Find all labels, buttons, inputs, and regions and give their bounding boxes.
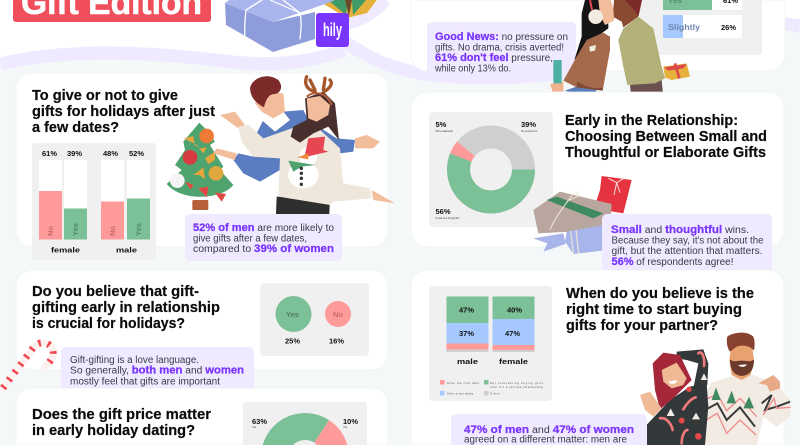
legend: Not considering buying gifts	[490, 381, 544, 385]
panel: small or elaborate	[411, 92, 784, 247]
chart: yes and no circles	[260, 283, 369, 356]
legend: Other	[490, 392, 500, 396]
callout: small and thoughtful: Small and thoughtful wins.	[611, 224, 749, 236]
callout: 47% agreed	[451, 414, 647, 445]
bar chart: female and male: No	[108, 226, 117, 236]
callout: good news: gifts. No drama, crisis averted!	[435, 42, 564, 54]
donut chart: gift type: 5%	[436, 120, 447, 129]
bar chart: female and male: 61%	[42, 149, 57, 158]
bar chart: female and male: Yes	[71, 223, 80, 236]
heading	[32, 87, 215, 136]
chart: yes and no circles: 16%	[329, 336, 344, 346]
chart: yes and no circles: Yes	[286, 310, 299, 319]
woman	[640, 349, 708, 445]
callout: good news: while only 13% do.	[434, 64, 511, 74]
heading: To give or not to give	[32, 87, 178, 104]
stacked bar chart: 47%	[505, 329, 520, 338]
donut chart: gift type: More elaborate	[436, 129, 454, 133]
bar chart: female and male: No	[46, 226, 55, 236]
heading: a few dates?	[32, 119, 119, 136]
callout: small and thoughtful: 56% of respondents agree!	[612, 256, 734, 268]
legend: until it's a serious relationship	[490, 385, 544, 389]
icon: candy cane	[3, 343, 53, 388]
callout: 52% of men: 52% of men are more likely to	[193, 222, 334, 234]
bar chart: female and male: Yes	[134, 223, 143, 236]
illustration: gifts	[533, 176, 632, 254]
heading: gifts for holidays after just	[32, 103, 215, 120]
donut chart: gift type: 39%	[521, 120, 536, 129]
donut chart: gift type: 56%	[436, 207, 451, 216]
callout: good news: 61% don't feel pressure,	[435, 52, 553, 64]
chart: yes and no circles: 25%	[285, 336, 300, 346]
bar chart: pressure: 26%	[721, 23, 736, 32]
icon: christmas tree	[167, 123, 233, 210]
bar chart: pressure	[640, 0, 762, 55]
illustration: holiday couple and tree	[167, 76, 395, 214]
callout: 52% of men: give gifts after a few dates,	[193, 234, 307, 244]
heading: Do you believe that gift-	[32, 283, 199, 300]
bar chart: female and male: male	[116, 246, 137, 254]
bar chart: female and male: 52%	[129, 149, 144, 158]
bar chart: female and male: 48%	[103, 149, 118, 158]
icon: Hily logo: hily	[323, 20, 342, 40]
donut chart: gift type	[429, 112, 553, 227]
callout: small and thoughtful	[602, 214, 772, 274]
stacked bar chart: 40%	[507, 306, 522, 314]
woman	[550, 0, 614, 100]
heading: gifting early in relationship	[32, 299, 220, 316]
stacked bar chart: 47%	[459, 306, 474, 314]
man	[213, 76, 380, 182]
callout: good news: Good News: no pressure on	[435, 31, 568, 43]
bar chart: female and male	[32, 143, 156, 260]
stacked bar chart	[429, 286, 552, 401]
callout: love language: Gift-gifting is a love language.	[70, 355, 199, 366]
panel: gift price	[16, 388, 388, 445]
heading	[565, 112, 767, 161]
heading: in early holiday dating?	[32, 422, 195, 439]
legend	[440, 380, 544, 396]
heading: When do you believe is the	[566, 285, 754, 302]
bar chart: pressure: Slightly	[668, 23, 701, 32]
heading: Does the gift price matter	[32, 406, 211, 423]
donut chart: price	[243, 402, 367, 445]
donut chart: price: 10%	[343, 417, 358, 426]
icon: snowman	[288, 137, 328, 188]
icon: gift box	[225, 0, 377, 52]
man	[613, 0, 690, 102]
donut chart: price: Yes	[343, 425, 348, 429]
heading: Early in the Relationship:	[565, 112, 738, 129]
icon: Hily logo	[316, 13, 349, 47]
heading	[32, 283, 220, 332]
panel: pressure results	[411, 0, 785, 71]
callout: love language: So generally, both men and women	[70, 364, 244, 376]
callout: good news	[427, 22, 576, 80]
heading: Choosing Between Small and	[565, 128, 767, 145]
stacked bar chart: 37%	[459, 329, 474, 338]
man	[705, 333, 791, 445]
heading: Thoughtful or Elaborate Gifts	[565, 144, 766, 161]
chart: yes and no circles: No	[333, 310, 343, 319]
legend: After the first date	[447, 381, 480, 385]
illustration: kissing couple	[550, 0, 690, 102]
heading: right time to start buying	[566, 301, 742, 318]
panel: gift-gifting crucial	[16, 270, 388, 370]
panel: give or not	[16, 73, 388, 260]
callout: love language: mostly feel that gifts are important	[70, 376, 220, 388]
stacked bar chart: male	[457, 357, 478, 366]
donut chart: price: Yes	[252, 425, 257, 429]
heading: is crucial for holidays?	[32, 315, 185, 332]
callout: 52% of men: compared to 39% of women	[193, 243, 334, 255]
woman	[220, 77, 395, 214]
stacked bar chart: female	[499, 357, 528, 366]
callout: small and thoughtful: Because they say, it's not about the	[612, 236, 764, 246]
bar chart: female and male: female	[51, 246, 80, 254]
callout: love language	[61, 347, 254, 391]
illustration: couple in sweaters	[640, 333, 791, 445]
bar chart: female and male: 39%	[67, 149, 82, 158]
callout: 52% of men	[185, 214, 342, 261]
heading: gifts for your partner?	[566, 317, 718, 334]
heading	[32, 406, 211, 439]
legend: After a few dates	[447, 392, 474, 396]
donut chart: gift type: Small and thoughtful	[436, 216, 460, 220]
heading	[566, 285, 754, 334]
donut chart: price: 63%	[252, 417, 267, 426]
panel: when to buy	[411, 270, 784, 445]
donut chart: gift type: No preference	[521, 129, 538, 133]
callout: 47% agreed: 47% of men and 47% of women	[464, 424, 634, 436]
callout: small and thoughtful: gift, but the attention that matters.	[612, 246, 762, 257]
